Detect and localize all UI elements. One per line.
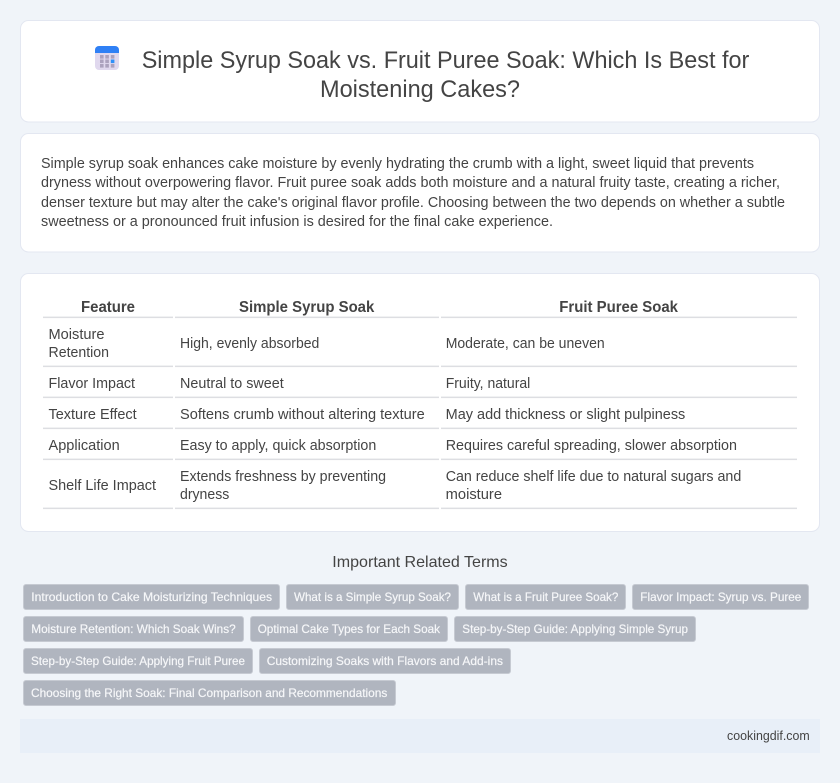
intro paragraph [41,156,785,230]
intro paragraph: dryness without overpowering flavor. Fruit puree soak adds both moisture and a natural fruity taste, creating a richer, [41,175,780,191]
tag: What is a Simple Syrup Soak? [294,590,451,604]
tag: Choosing the Right Soak: Final Comparison and Recommendations [31,686,387,700]
row: shelf life impact: Shelf Life Impact [48,478,156,494]
tag [466,584,626,610]
panel: introduction text [20,134,820,252]
icon: calendar [95,46,119,70]
tag: Moisture Retention: Which Soak Wins? [31,622,236,636]
tag [24,584,280,610]
footer source text: cookingdif.com [727,729,810,743]
row: flavor impact: Fruity, natural [446,376,530,392]
row: application: Application [48,438,120,454]
heading: important related terms: Important Related Terms [332,554,508,571]
tag [24,648,252,674]
row: flavor impact: Flavor Impact [48,376,135,392]
row: texture effect: Softens crumb without altering texture [180,407,425,423]
tag: Introduction to Cake Moisturizing Techniques [31,590,272,604]
row: application [48,438,737,454]
tag: Customizing Soaks with Flavors and Add-ins [267,654,503,668]
row: application: Requires careful spreading, slower absorption [446,438,737,454]
tag [260,648,510,674]
title: Simple Syrup Soak vs. Fruit Puree Soak: Which Is Best for [142,47,749,74]
row: shelf life impact: dryness [180,487,229,503]
table header row: Simple Syrup Soak [239,299,374,316]
row: shelf life impact [48,469,741,503]
intro paragraph: denser texture but may alter the cake's original flavor profile. Choosing between the two depends on whether a subtle [41,195,785,211]
row: texture effect: May add thickness or slight pulpiness [446,407,685,423]
panel: comparison table [20,274,820,532]
title: Moistening Cakes? [320,76,520,103]
table header row: Fruit Puree Soak [559,299,678,316]
tag [24,616,244,642]
row: flavor impact: Neutral to sweet [180,376,284,392]
row: application: Easy to apply, quick absorption [180,438,376,454]
row: moisture retention: Moisture [48,327,104,343]
tag: Step-by-Step Guide: Applying Fruit Puree [31,654,245,668]
tag: Step-by-Step Guide: Applying Simple Syrup [462,622,688,636]
row: flavor impact [48,376,530,392]
tag [250,616,448,642]
intro paragraph: sweetness or a pronounced fruit infusion is desired for the final cake experience. [41,214,553,230]
footer bar [20,719,820,753]
row: texture effect: Texture Effect [48,407,137,423]
tag: What is a Fruit Puree Soak? [473,590,619,604]
tag [632,584,808,610]
intro paragraph: Simple syrup soak enhances cake moisture by evenly hydrating the crumb with a light, sweet liquid that prevents [41,156,754,172]
title [142,47,749,103]
row: shelf life impact: moisture [446,487,502,503]
row: moisture retention: Retention [48,345,109,361]
row: texture effect [48,407,685,423]
tag: Optimal Cake Types for Each Soak [258,622,441,636]
row: moisture retention: High, evenly absorbed [180,336,319,352]
row: moisture retention [48,327,605,361]
tag [286,584,458,610]
tag [24,680,396,706]
tag: Flavor Impact: Syrup vs. Puree [640,590,802,604]
row: shelf life impact: Extends freshness by preventing [180,469,386,485]
row: moisture retention: Moderate, can be uneven [446,336,605,352]
table header row: Feature [81,299,135,316]
related term tags [24,584,808,706]
table header row [81,299,678,316]
header panel [20,20,820,122]
tag [454,616,696,642]
row: shelf life impact: Can reduce shelf life due to natural sugars and [446,469,741,485]
